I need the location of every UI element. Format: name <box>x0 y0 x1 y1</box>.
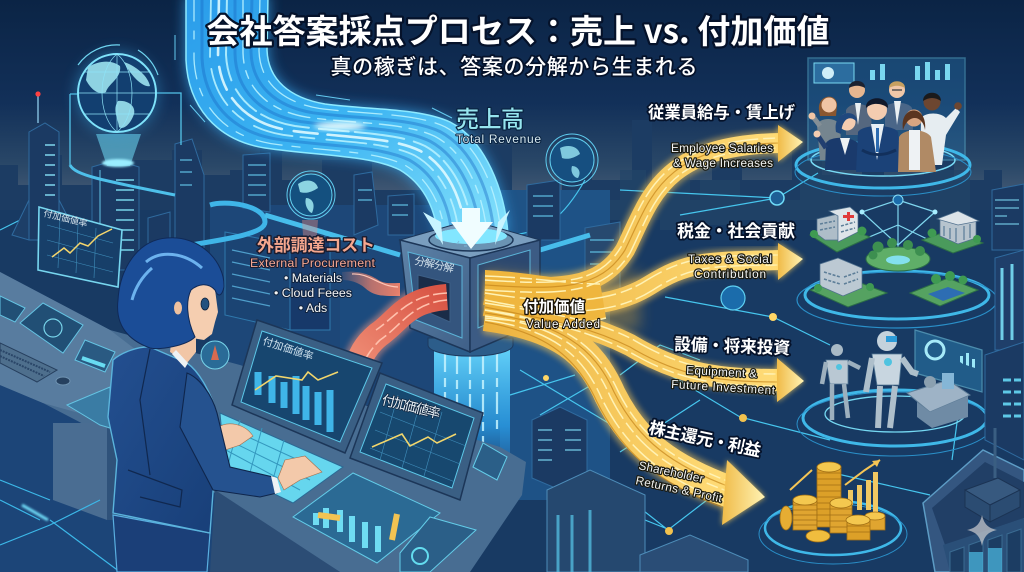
globe 3 <box>546 134 598 186</box>
label: shareholder returns: 株主還元・利益 <box>647 413 764 462</box>
label: equipment and future investment: 設備・将来投資 <box>674 330 791 359</box>
globe 2 <box>287 171 335 250</box>
thin red cost ribbon <box>342 272 447 372</box>
platform 3: equipment and robots <box>797 330 993 456</box>
value added gold flow <box>485 138 780 507</box>
glowing pipe lines <box>70 93 590 255</box>
label: value added: Value Added <box>526 319 600 331</box>
coin stacks <box>780 462 885 542</box>
suit jacket <box>108 347 217 533</box>
stream below the box <box>434 345 510 480</box>
museum <box>922 211 983 253</box>
hair <box>118 238 224 349</box>
workstation desk <box>907 373 970 428</box>
label: external procurement: • Cloud Feees <box>274 286 352 300</box>
hospital <box>810 207 870 252</box>
label: taxes and social contribution: 税金・社会貢献 <box>677 217 795 242</box>
school <box>810 258 887 307</box>
ear <box>174 302 182 314</box>
large robot <box>866 331 918 428</box>
label: external procurement: • Ads <box>299 301 327 315</box>
label: taxes and social contribution <box>677 217 795 281</box>
screen 2: value added ratio line chart <box>350 373 483 500</box>
label: shareholder returns <box>634 413 764 505</box>
arrow heads of gold flows <box>722 125 804 525</box>
arm on keyboard <box>180 373 277 497</box>
analyst woman <box>108 238 322 572</box>
front hand <box>278 456 322 490</box>
red ribbon emerging from box window <box>356 293 447 372</box>
label: equipment and future investment: Future Investment <box>671 377 776 397</box>
title: 会社答案採点プロセス：売上 vs. 付加価値 <box>206 5 830 53</box>
label: external procurement: 外部調達コスト <box>257 231 375 256</box>
left console instruments <box>0 296 229 428</box>
shirt cuff <box>271 476 281 494</box>
server racks behind the analyst <box>225 232 400 350</box>
distant city skyline <box>0 120 1024 572</box>
front row <box>814 98 936 172</box>
holographic wall behind staff <box>808 58 965 160</box>
label: total revenue: Total Revenue <box>456 132 541 146</box>
decomposition box <box>400 220 540 356</box>
label: total revenue <box>456 100 541 146</box>
trend chart <box>790 460 880 512</box>
label: external procurement <box>250 231 376 315</box>
label: shareholder returns: Shareholder <box>637 458 705 486</box>
hologram panel <box>915 330 982 392</box>
label: external procurement: • Materials <box>284 271 342 285</box>
subtitle: 真の稼ぎは、答案の分解から生まれる <box>330 51 698 81</box>
bottom right building with rooftop <box>923 428 1024 572</box>
label: employee salaries: 従業員給与・賃上げ <box>648 99 796 123</box>
platform rings <box>795 142 971 196</box>
hair shine <box>132 254 202 300</box>
rings <box>759 501 907 564</box>
revenue stream flow <box>175 0 508 235</box>
platform 2: society <box>797 195 997 328</box>
label: shareholder returns: Returns & Profit <box>634 473 724 505</box>
background circuit lines <box>0 173 960 535</box>
neck <box>170 335 196 363</box>
jacket seams <box>128 349 182 507</box>
label: total revenue: 売上高 <box>456 100 524 134</box>
bright keyboard <box>220 413 343 503</box>
box label: 分解分解 <box>413 253 456 276</box>
label: taxes and social contribution: Taxes & Social <box>688 252 772 266</box>
incoming arrows into box <box>423 208 510 249</box>
label: employee salaries <box>648 99 796 170</box>
label: value added <box>523 295 600 331</box>
white collar <box>172 350 188 368</box>
screen 1: value added ratio chart: 付加価値率 <box>261 334 315 363</box>
label: external procurement: External Procurement <box>250 256 376 270</box>
top-left tower with antenna <box>12 91 72 240</box>
label: equipment and future investment <box>671 330 791 397</box>
main console desk <box>0 272 526 572</box>
back row <box>808 81 962 165</box>
face profile <box>180 282 218 340</box>
left chart panel <box>38 207 122 287</box>
eye <box>201 298 209 310</box>
lower console screens <box>293 443 507 572</box>
bottom centre buildings <box>532 407 748 572</box>
platform 1: employees <box>795 58 971 196</box>
label: value added: 付加価値 <box>523 295 585 317</box>
small robot <box>822 344 860 420</box>
label: taxes and social contribution: Contribution <box>694 267 766 281</box>
rings <box>797 271 997 328</box>
left chart panel: 付加価値率 <box>43 207 89 229</box>
screen 2: value added ratio line chart: 付加価値率 <box>380 392 442 421</box>
back hand <box>216 424 253 450</box>
watermark sparkle <box>967 515 997 546</box>
network nodes <box>850 195 950 250</box>
screen 1: value added ratio chart <box>232 320 382 453</box>
right edge towers <box>985 184 1024 460</box>
park with fountain <box>866 238 930 271</box>
label: employee salaries: & Wage Increases <box>673 156 773 170</box>
globe 1 with hologram beam <box>75 45 159 167</box>
label: equipment and future investment: Equipment & <box>686 363 758 381</box>
solar farm <box>910 271 978 306</box>
towers mid-left <box>148 139 620 300</box>
label: employee salaries: Employee Salaries <box>671 141 773 155</box>
server tower under globe <box>92 160 139 270</box>
platform 4: coins <box>759 460 907 564</box>
rings <box>797 390 993 456</box>
staff group <box>808 81 962 172</box>
skirt <box>113 515 210 572</box>
